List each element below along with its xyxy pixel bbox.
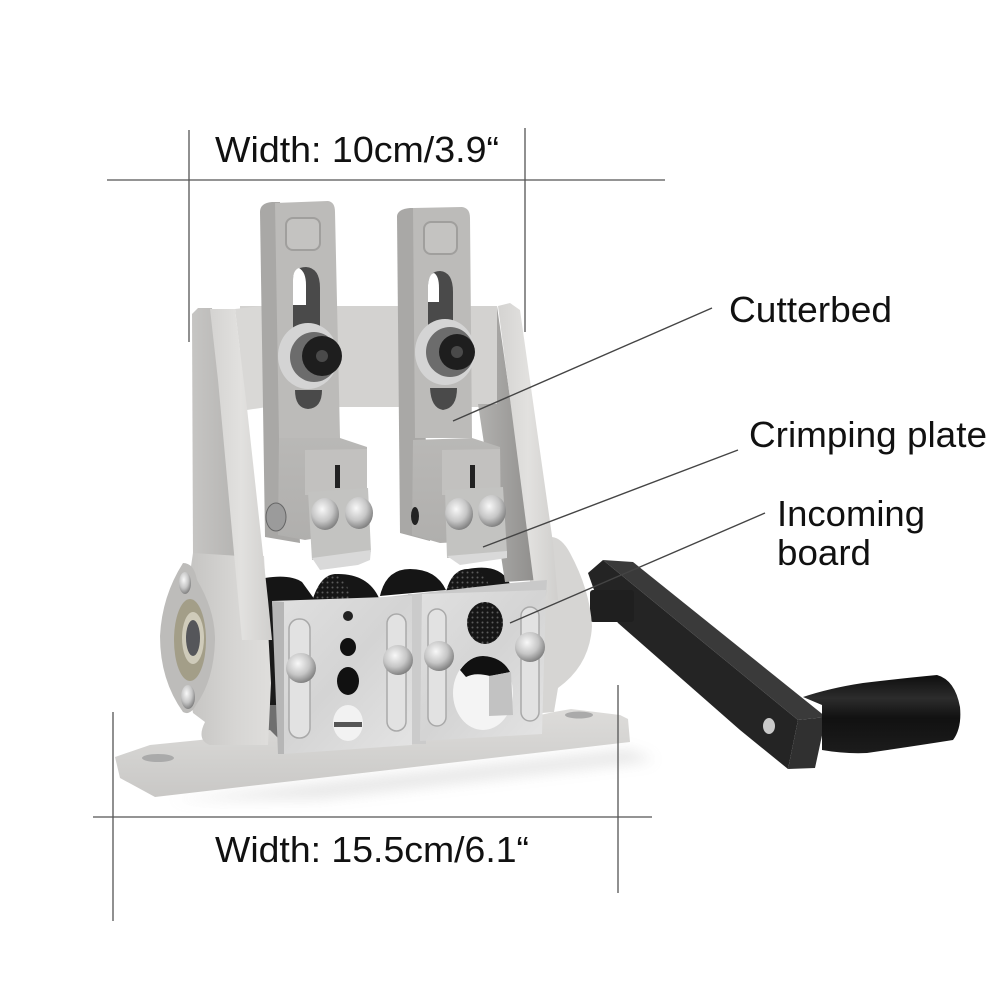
frame: left leg side [192,308,240,560]
mounting holes [142,754,174,762]
crimping plate label: Crimping plate [749,414,987,455]
product: wire stripping machine [115,201,960,800]
incoming label: Incoming [777,493,925,534]
small side screw [266,503,286,531]
square recess [424,222,457,254]
frame: left leg strip [210,309,272,640]
left arm bolt [278,323,342,389]
scale mark [335,465,340,488]
arm side strip [260,202,300,543]
callout: crimping plate [483,414,987,547]
lower block [412,438,502,543]
crimping plate leader line [483,450,738,547]
frame: right leg strip [498,303,558,600]
bar top face [603,560,826,720]
base shadow [170,750,655,800]
handle grip knob [803,675,960,753]
lower block [278,438,367,540]
top width label: Width: 10cm/3.9“ [215,129,499,170]
body [180,553,271,745]
left body and foot [115,553,630,797]
cutterbed leader line [453,308,712,421]
adjustment slot [293,267,320,330]
square recess [286,218,320,250]
scale mark [470,465,475,488]
bottom width lines [93,685,652,921]
arm side strip [397,208,430,541]
left bearing hub [160,563,215,713]
board label: board [777,532,871,573]
top width lines [107,128,665,342]
arm front face [413,207,472,438]
handle rod [590,590,634,622]
callout: incoming board [510,493,925,623]
bar front face [588,560,798,769]
incoming board: right plate [420,590,546,741]
incoming board leader line [510,513,765,623]
frame: right hub [530,537,592,714]
incoming board: left plate [272,596,413,754]
cutterbed label: Cutterbed [729,289,892,330]
frame: cross bar left end [235,306,267,410]
black feed rollers [264,568,512,752]
callout: cutterbed [453,289,892,421]
right cutter arm [397,207,502,543]
right arm bolt [415,319,475,385]
frame: cross bar [240,306,497,407]
bottom width label: Width: 15.5cm/6.1“ [215,829,529,870]
handle crank bar [588,560,826,769]
incoming board: gap between plates [408,594,426,744]
foot [115,709,630,797]
rivet [763,718,775,734]
crimping plate: left [308,488,373,570]
side hole [411,507,419,525]
frame: right leg inner face [478,306,536,582]
left cutter arm [260,201,367,543]
crimping plate: right [445,487,507,565]
arm front face [275,201,340,438]
bar end face [788,717,826,769]
adjustment slot [428,271,453,330]
incoming board: top rim [378,580,547,604]
